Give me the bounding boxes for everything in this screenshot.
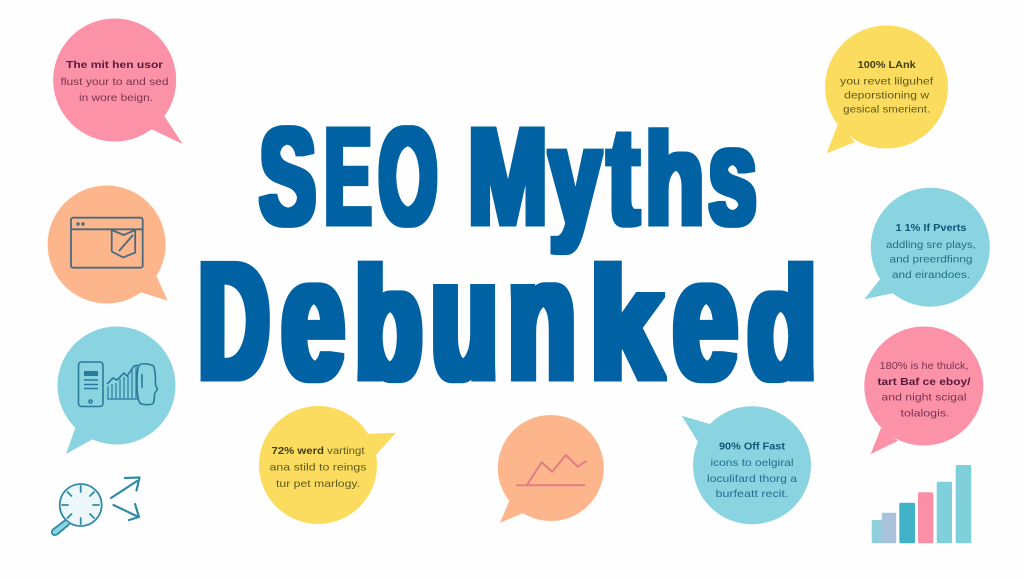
title line: SEO Myths	[260, 100, 756, 254]
bubble text: you revet lilguhef	[840, 76, 933, 88]
title line: SEO Myths: S	[260, 100, 316, 254]
bubble text: The mit hen usor	[66, 59, 163, 71]
title line: Debunked: n	[508, 222, 576, 417]
title line: SEO Myths: h	[645, 106, 704, 252]
title line: Debunked: D	[199, 227, 269, 415]
bubble text: gesical smerient.	[843, 104, 930, 116]
bar chart	[872, 465, 971, 543]
panel: yellow bubble top right	[825, 26, 948, 153]
panel: yellow bubble bottom	[259, 406, 396, 524]
title line: Debunked: u	[431, 222, 498, 417]
bubble text: ana stild to reings	[270, 462, 366, 474]
bubble text: burfeatt recit.	[716, 488, 788, 500]
bubble text: icons to oelgiral	[710, 457, 794, 469]
bubble text: addling sre plays,	[886, 239, 976, 251]
bubble text	[840, 59, 933, 116]
title line: Debunked: k	[590, 234, 663, 413]
icon: magnifying glass with arrows	[52, 478, 140, 535]
panel: orange bubble with browser icon	[48, 186, 168, 304]
title	[199, 100, 816, 417]
bubble text: 72% werd vartingt	[272, 445, 365, 457]
bubble text: loculifard thorg a	[707, 473, 797, 485]
panel: teal bubble bottom	[682, 406, 811, 524]
bubble text: 90% Off Fast	[719, 440, 786, 452]
bubble text: and eirandoes.	[892, 269, 970, 281]
bubble text: 180% is he thulck,	[880, 360, 968, 372]
title line: Debunked: b	[355, 234, 422, 413]
title line: SEO Myths: y	[549, 100, 601, 254]
bubble text: 1 1% If Pverts	[896, 222, 967, 234]
icon: phone, growth chart and head	[78, 362, 158, 406]
bubble text	[878, 360, 971, 420]
bubble text: tart Baf ce eboy/	[878, 376, 971, 388]
bubble text: in wore beign.	[79, 92, 153, 104]
title line: SEO Myths: s	[709, 100, 756, 254]
title line: SEO Myths: O	[379, 100, 437, 254]
icon: line chart	[517, 455, 586, 485]
title line: Debunked: d	[748, 234, 816, 413]
title line: SEO Myths: t	[607, 100, 639, 254]
bubble text: and preerdfinng	[890, 254, 973, 266]
bubble text: tolalogis.	[900, 408, 950, 420]
title line: SEO Myths: M	[468, 100, 548, 254]
bubble text	[707, 440, 797, 500]
panel: pink bubble top left	[53, 18, 183, 144]
panel: orange bubble with line chart	[498, 415, 604, 523]
title line: Debunked: e	[673, 222, 737, 417]
title line: Debunked	[199, 222, 816, 417]
panel: pink bubble right	[864, 326, 983, 454]
bubble text	[60, 59, 169, 104]
bubble text: and night scigal	[882, 392, 966, 404]
bubble text: 100% LAnk	[858, 59, 916, 71]
bubble text	[886, 222, 976, 281]
bubble text: tur pet marlogy.	[276, 478, 360, 490]
title line: Debunked: e	[282, 222, 344, 417]
bubble text: flust your to and sed	[60, 76, 169, 88]
bubble text: deporstioning w	[844, 90, 930, 102]
panel: teal bubble right	[864, 188, 990, 307]
title line: SEO Myths: E	[325, 100, 371, 254]
bubble text	[270, 445, 366, 490]
icon: browser window with shield	[71, 218, 143, 268]
panel: teal bubble with phone and chart icon	[58, 326, 176, 454]
